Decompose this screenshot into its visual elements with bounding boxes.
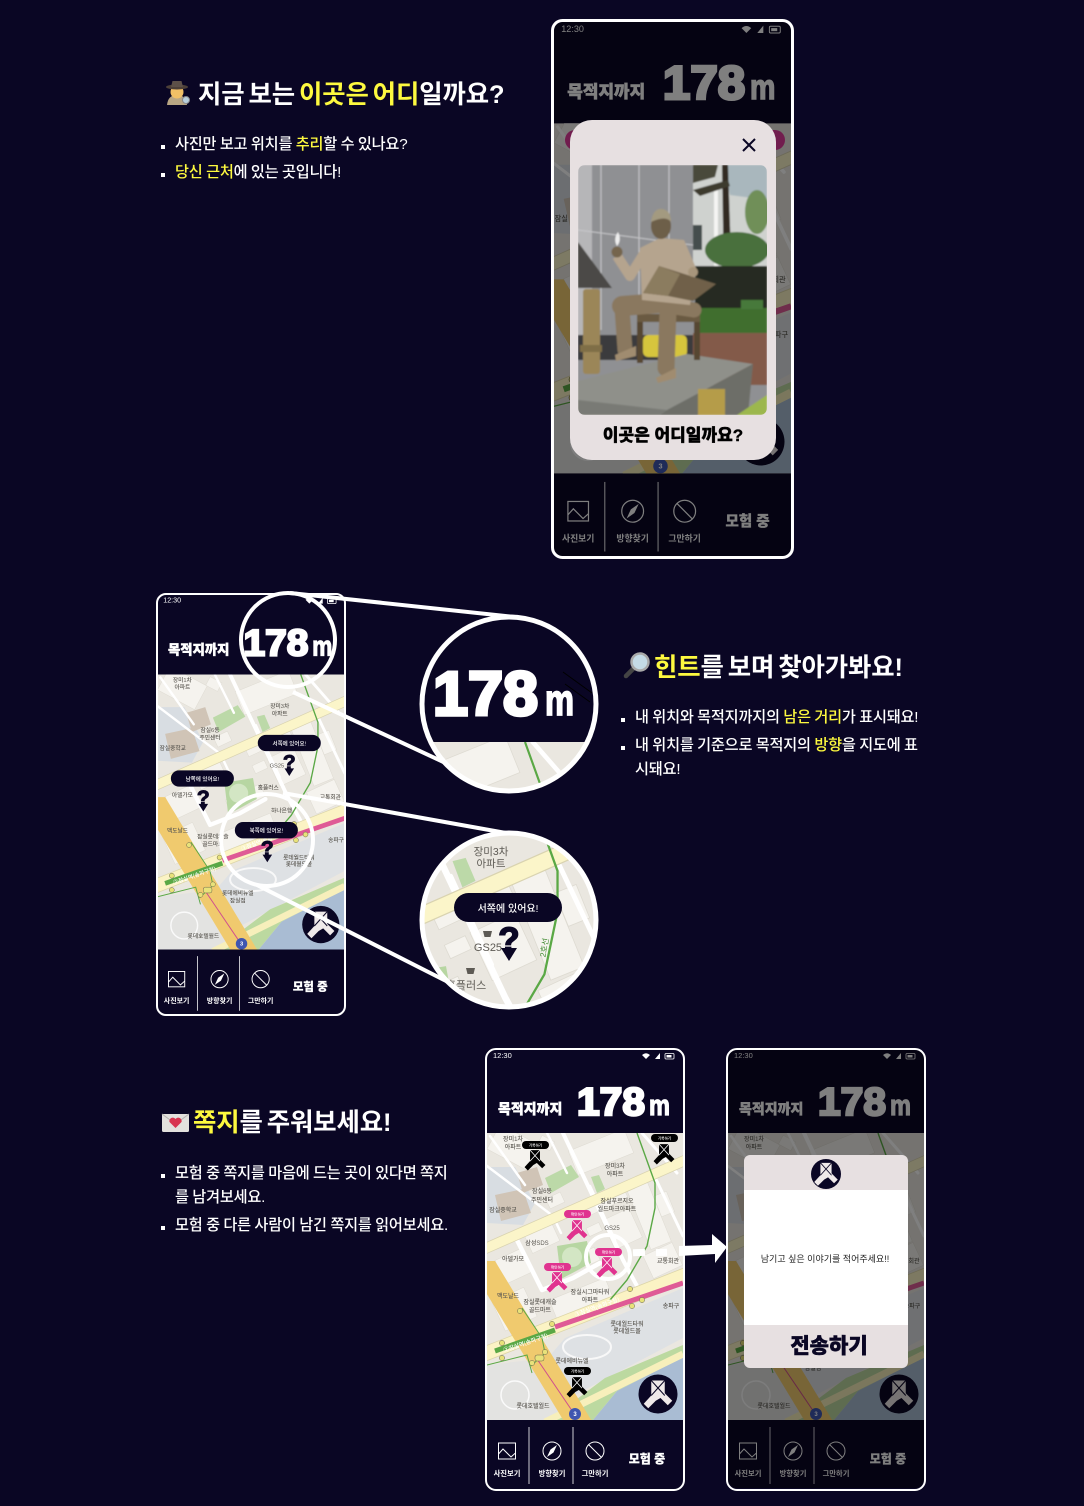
- phone: map with notes: 178: [577, 1081, 645, 1124]
- map labels: ③잠실역(송파구청): [574, 1295, 621, 1319]
- map labels: 홈플러스: [258, 783, 279, 791]
- magnified lens: hint: 서쪽에 있어요!: [478, 903, 538, 915]
- phone: photo hint screen: 방향찾기: [616, 533, 649, 544]
- map labels: 장미1차: [503, 1135, 523, 1143]
- phone: write note popup: 그만하기: [823, 1469, 849, 1478]
- phone: map with notes: 모험 중: [629, 1451, 665, 1466]
- map labels: 주민센터: [531, 1196, 553, 1204]
- map labels: 3: [573, 1412, 577, 1418]
- magnified lens: distance: m: [545, 676, 574, 725]
- map labels: 아파트: [505, 1143, 522, 1151]
- phone: photo hint screen: [544, 20, 797, 558]
- map labels: 롯데월드몰: [286, 860, 312, 868]
- bullet: deduce: 사진만 보고 위치를 추리할 수 있나요?: [175, 136, 407, 153]
- popup prompt: 남기고 싶은 이야기를 적어주세요!!: [761, 1253, 889, 1264]
- phone: map with direction hints: 목적지까지: [168, 642, 229, 657]
- hint bubble: south: [171, 770, 234, 812]
- phone: photo hint screen: 모험 중: [726, 512, 770, 530]
- map labels: 교통회관: [657, 1257, 680, 1265]
- bullet: leave note: 를 남겨보세요.: [175, 1189, 265, 1206]
- map labels: GS25: [604, 1226, 620, 1232]
- hint bubble: north: ?: [261, 838, 274, 861]
- map labels: 아파트: [272, 710, 288, 718]
- phone: map with notes: 그만하기: [582, 1469, 608, 1478]
- bullet: read notes: 모험 중 다른 사람이 남긴 쪽지를 읽어보세요.: [175, 1217, 448, 1234]
- map labels: 롯데에비뉴엘: [555, 1357, 589, 1365]
- map labels: 아델가모: [502, 1255, 525, 1263]
- popup: photo card: [570, 120, 776, 460]
- phone: map with direction hints: 방향찾기: [207, 996, 232, 1005]
- map labels: 장미3차: [605, 1162, 625, 1170]
- hint bubble: west: [258, 735, 321, 776]
- zoom connector lines: [221, 593, 515, 984]
- phone: photo hint screen: 사진보기: [562, 533, 594, 544]
- map labels: ③잠실역(송파구청): [240, 830, 285, 853]
- magnified lens: hint: 장미3차: [474, 846, 509, 858]
- phone: write note popup: 회관: [908, 1257, 920, 1265]
- note pin: pink 3: [544, 1263, 571, 1292]
- map labels: 롯데호텔월드: [188, 932, 219, 940]
- note pin: black 3: [564, 1367, 591, 1397]
- phone: map with notes: m: [649, 1090, 670, 1122]
- section 3 text: [161, 1109, 448, 1234]
- icon: love letter: [162, 1114, 189, 1132]
- bullet: distance: 내 위치와 목적지까지의 남은 거리가 표시돼요!: [635, 709, 918, 726]
- note pin: black 1: 기록하기: [529, 1142, 542, 1148]
- bullet: direction: 내 위치를 기준으로 목적지의 방향을 지도에 표: [635, 737, 918, 754]
- popup: write note: [744, 1155, 908, 1368]
- map labels: 하나은행: [271, 806, 292, 814]
- note pin: black 1: [522, 1141, 549, 1170]
- map labels: 골드마트: [202, 840, 223, 848]
- magnified lens: hint: [420, 830, 598, 1010]
- map labels: 장미3차: [270, 702, 290, 710]
- section 2 text: [621, 654, 918, 778]
- hint bubble: south: ?: [197, 787, 210, 810]
- phone: write note popup: 모험 중: [870, 1451, 906, 1466]
- phone: photo hint screen: 178: [663, 57, 745, 110]
- phone: write note popup: 송파구: [904, 1302, 921, 1310]
- map labels: 롯데월드몰: [613, 1327, 641, 1335]
- photo: statue: [578, 165, 769, 415]
- map labels: 롯데호텔월드: [516, 1402, 550, 1410]
- map labels: [160, 676, 344, 948]
- note pin: black 2: [651, 1134, 678, 1164]
- phone: map with notes: [479, 1049, 688, 1490]
- heading: where is this place: 지금 보는 이곳은 어디일까요?: [198, 81, 504, 109]
- map labels: 롯데에비뉴엘: [222, 889, 253, 897]
- map labels: 아파트: [174, 683, 190, 691]
- map labels: 맥도날드: [167, 827, 188, 835]
- phone: photo hint screen: 12:30: [561, 24, 584, 34]
- phone: map with direction hints: [150, 594, 349, 1015]
- phone: photo hint screen: 목적지까지: [567, 83, 645, 102]
- magnified lens: hint: GS25: [474, 942, 502, 954]
- map labels: 골드마트: [529, 1306, 552, 1314]
- map labels: 잠실6동: [532, 1187, 552, 1195]
- icon: detective: [166, 81, 190, 105]
- map labels: 송파구: [663, 1302, 680, 1310]
- phone: write note popup: 사진보기: [735, 1469, 761, 1478]
- map labels: 잠실시그마타워: [571, 1288, 609, 1296]
- note pin: pink 3: 확인하기: [551, 1264, 564, 1270]
- icon: close: [743, 139, 755, 151]
- map labels: 주민센터: [200, 734, 221, 742]
- icon: note ribbon: [811, 1159, 841, 1189]
- map labels: 롯데월드타워: [283, 853, 315, 861]
- note pin: pink 2: [595, 1248, 622, 1277]
- phone: write note popup: m: [890, 1090, 911, 1122]
- note circle highlight: [586, 1235, 630, 1279]
- map labels: GS25: [270, 763, 284, 769]
- magnified lens: hint: 아파트: [477, 858, 506, 870]
- map labels: 아파트: [582, 1296, 599, 1304]
- phone: map with direction hints: 178: [243, 621, 308, 663]
- map labels: 롯데월드타워: [610, 1320, 644, 1328]
- phone: write note popup: 방향찾기: [780, 1469, 806, 1478]
- map labels: ②잠실역(송파구청): [172, 864, 217, 887]
- phone: write note popup: 3: [814, 1412, 818, 1418]
- map labels: [489, 1135, 680, 1418]
- hint bubble: west: 서쪽에 있어요!: [273, 739, 307, 747]
- map labels: 잠실롯데캐슬: [523, 1298, 557, 1306]
- phone: photo hint screen: m: [750, 68, 775, 107]
- phone: write note popup: 아파트: [746, 1143, 763, 1151]
- icon: magnifier: [626, 654, 648, 676]
- magnified lens: distance: [420, 614, 598, 794]
- phone: map with notes: 방향찾기: [539, 1469, 565, 1478]
- hint bubble: south: 남쪽에 있어요!: [186, 775, 220, 783]
- phone: photo hint screen: 회관: [772, 275, 786, 284]
- hint bubble: north: [235, 822, 298, 862]
- phone: photo hint screen: 파구: [775, 330, 788, 339]
- phone: write note popup: 장미1차: [744, 1135, 764, 1143]
- magnified lens: hint: ?: [498, 921, 520, 960]
- map labels: 삼성SDS: [525, 1239, 549, 1247]
- phone: write note popup: 롯데호텔월드: [757, 1402, 791, 1410]
- phone: map with direction hints: 사진보기: [164, 996, 189, 1005]
- heading: pick up notes: 쪽지를 주워보세요!: [193, 1109, 391, 1137]
- bullet: leave note: 모험 중 쪽지를 마음에 드는 곳이 있다면 쪽지: [175, 1165, 448, 1182]
- section 1 text: [161, 81, 504, 181]
- note pin: pink 2: 확인하기: [602, 1250, 615, 1254]
- popup button: send: 전송하기: [790, 1335, 868, 1358]
- magnified lens: hint: 2호선: [538, 937, 551, 958]
- hint bubble: west: ?: [283, 751, 296, 774]
- phone: map with notes: 12:30: [493, 1051, 512, 1060]
- phone: photo hint screen: 잠실: [555, 214, 568, 223]
- map labels: 잠실푸르지오: [600, 1197, 634, 1205]
- bullet: direction: [621, 737, 918, 778]
- map labels: 잠실중학교: [160, 744, 186, 752]
- note pin: pink 1: 확인하기: [571, 1212, 584, 1216]
- map labels: 송파구: [328, 836, 344, 844]
- map labels: 잠실점: [230, 897, 246, 905]
- note pin: black 3: 기록하기: [571, 1368, 584, 1374]
- phone: map with direction hints: 그만하기: [248, 996, 273, 1005]
- note pin: black 2: 기록하기: [658, 1136, 671, 1140]
- bullet: direction: 시돼요!: [635, 761, 680, 778]
- bullet: leave note: [161, 1165, 448, 1206]
- note pin: pink 1: [564, 1210, 591, 1240]
- phone: photo hint screen: 3: [658, 461, 663, 471]
- phone: write note popup: 12:30: [734, 1051, 753, 1060]
- map labels: ②잠실역(송파구청): [502, 1331, 549, 1354]
- heading: follow hints: 힌트를 보며 찾아가봐요!: [654, 654, 903, 682]
- map labels: 3: [240, 942, 243, 948]
- phone: map with direction hints: 모험 중: [293, 980, 328, 994]
- phone: write note popup: 178: [818, 1081, 886, 1124]
- phone: write note popup: 목적지까지: [739, 1101, 803, 1117]
- map labels: 맥도날드: [497, 1292, 520, 1300]
- map labels: 월드마크아파트: [598, 1205, 637, 1213]
- map labels: 잠실6동: [201, 726, 219, 734]
- phone: map with notes: 목적지까지: [498, 1101, 562, 1117]
- phone: write note popup: [720, 1049, 929, 1490]
- map labels: 아파트: [607, 1170, 624, 1178]
- phone: photo hint screen: 그만하기: [668, 533, 701, 544]
- map labels: 잠실롯데캐슬: [197, 832, 229, 840]
- map labels: 교통회관: [320, 793, 342, 801]
- magnified lens: distance: 178: [433, 660, 538, 729]
- hint bubble: north: 북쪽에 있어요!: [250, 827, 284, 835]
- popup question: 이곳은 어디일까요?: [603, 426, 743, 445]
- arrow: to note popup: [633, 1234, 727, 1263]
- map labels: 아델가모: [172, 791, 193, 799]
- phone: map with direction hints: 12:30: [163, 597, 181, 605]
- map labels: 장미1차: [173, 676, 193, 684]
- phone: map with direction hints: m: [312, 630, 332, 661]
- phone: map with notes: 사진보기: [494, 1469, 520, 1478]
- phone: write note popup: 잠실점: [805, 1364, 821, 1372]
- map labels: 잠실중학교: [489, 1206, 517, 1214]
- bullet: nearby: 당신 근처에 있는 곳입니다!: [175, 164, 341, 181]
- magnified lens: hint: 홈플러스: [446, 978, 486, 992]
